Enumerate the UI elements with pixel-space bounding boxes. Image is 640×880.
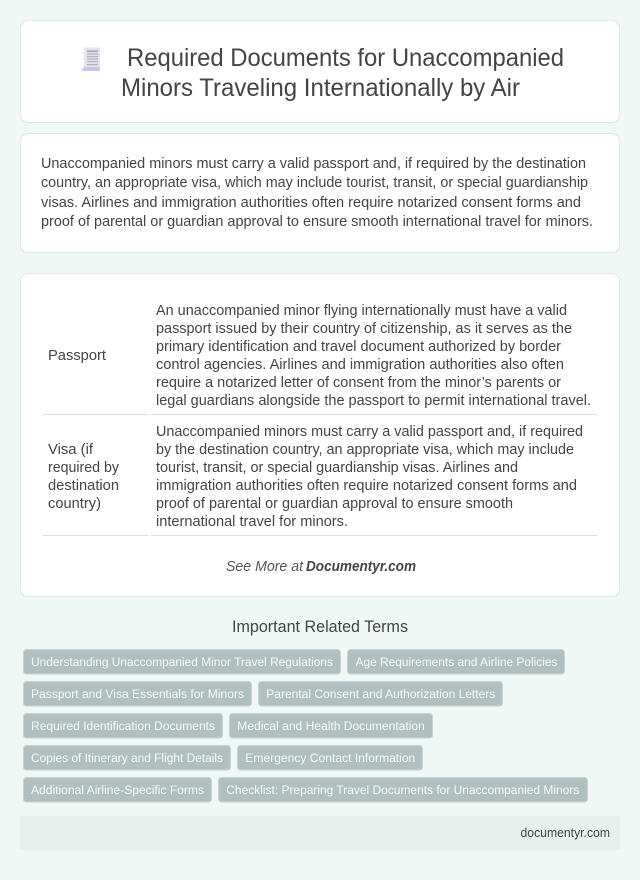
panel: title card [20,20,620,122]
tag: checklist: Checklist: Preparing Travel Documents for Unaccompanied Minors [226,783,579,797]
description: visa: proof of parental or guardian approval to ensure smooth [156,495,513,512]
panel: documents table [20,274,620,596]
tag: understanding regulations: Understanding Unaccompanied Minor Travel Regulations [31,655,333,669]
tag: understanding regulations [24,650,340,674]
tag: required identification [24,714,222,738]
tag: emergency contact [238,746,422,770]
tag: medical documentation [230,714,432,738]
tag: checklist [218,778,588,802]
tag: airline forms: Additional Airline-Specific Forms [31,783,204,797]
intro text block: Unaccompanied minors must carry a valid passport and, if required by the destination [41,155,586,172]
label: visa: Visa (if [48,441,94,458]
footer [20,816,620,850]
see more link: See More at [226,558,304,575]
description: visa: immigration authorities often require notarized consent forms and [156,477,577,494]
description: passport: legal guardians alongside the passport to permit international travel. [156,392,591,409]
description: visa: international travel for minors. [156,513,348,530]
description: passport: primary identification and travel document authorized by border [156,338,561,355]
heading: important related terms: Important Related Terms [232,618,408,636]
footer: documentyr.com [520,826,610,840]
description: passport: control agencies. Airlines and immigration authorities also often [156,356,564,373]
label: passport: Passport [48,347,107,364]
table row: visa [48,423,583,530]
tag: required identification: Required Identification Documents [31,719,215,733]
table row: passport [48,302,591,409]
tag: age requirements [348,650,564,674]
intro text block [41,155,593,230]
description: passport: An unaccompanied minor flying internationally must have a valid [156,302,567,319]
tag: airline forms [24,778,212,802]
description: visa: Unaccompanied minors must carry a valid passport and, if required [156,423,583,440]
tag: passport and visa: Passport and Visa Essentials for Minors [31,687,244,701]
description: passport: passport issued by their country of citizenship, as it serves as the [156,320,572,337]
title: Minors Traveling Internationally by Air [121,74,520,102]
tag: passport and visa [24,682,252,706]
tag: medical documentation: Medical and Health Documentation [237,719,425,733]
label: visa: country) [48,495,101,512]
tag: itinerary copies [24,746,230,770]
see more link: Documentyr.com [306,558,416,575]
title: Required Documents for Unaccompanied [127,44,564,72]
description: passport: require a notarized letter of consent from the minor’s parents or [156,374,561,391]
panel: related term tags [24,650,588,802]
intro text block: country, an appropriate visa, which may include tourist, transit, or special guardianship [41,174,588,191]
title [121,44,564,102]
icon: document scroll [82,48,100,71]
description: visa: tourist, transit, or special guardianship visas. Airlines and [156,459,518,476]
description: visa: by the destination country, an appropriate visa, which may include [156,441,574,458]
tag: emergency contact: Emergency Contact Information [245,751,415,765]
label: visa: required by [48,459,119,476]
label: visa: destination [48,477,119,494]
description: visa [156,423,583,530]
intro text block: visas. Airlines and immigration authorities often require notarized consent forms and [41,194,581,211]
tag: parental consent [258,682,502,706]
tag: age requirements: Age Requirements and Airline Policies [356,655,558,669]
panel: introduction [20,134,620,252]
label: visa [48,441,119,512]
tag: parental consent: Parental Consent and Authorization Letters [266,687,495,701]
intro text block: proof of parental or guardian approval to ensure smooth international travel for minors. [41,213,593,230]
see more link [226,558,416,575]
tag: itinerary copies: Copies of Itinerary and Flight Details [31,751,223,765]
description: passport [156,302,591,409]
